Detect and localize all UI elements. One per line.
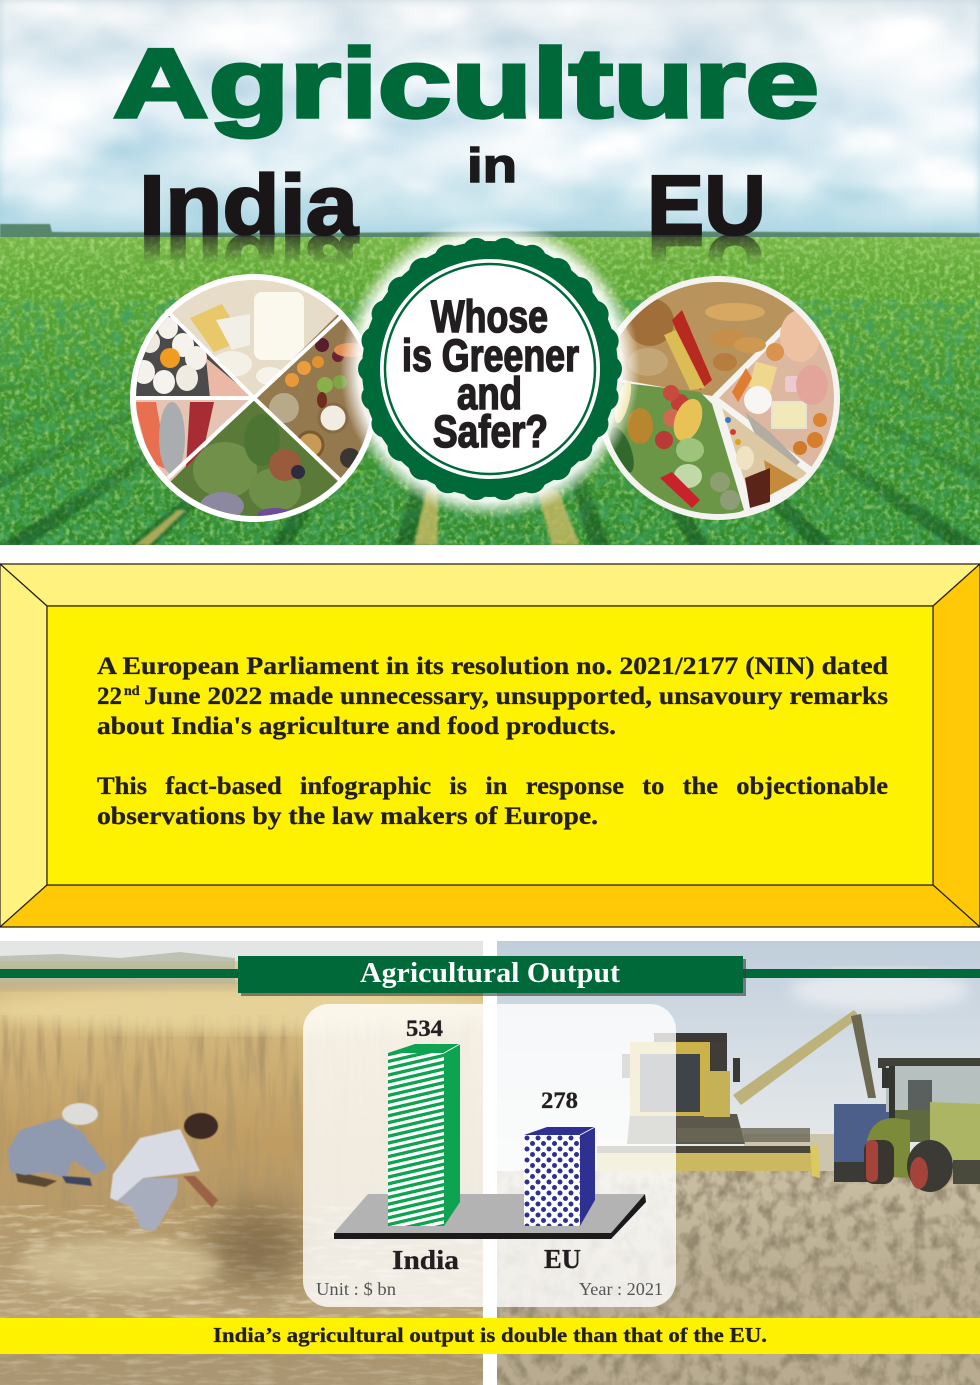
wedge: meat and dairy	[719, 311, 834, 467]
intro text: first paragraph: about India's agriculture and food products.	[97, 713, 616, 740]
intro text: first paragraph: nd	[124, 684, 140, 699]
wedge: pulses and nuts	[256, 314, 370, 482]
title: Agriculture: Agriculture	[113, 28, 819, 138]
intro text: second paragraph	[97, 773, 888, 830]
tractor	[864, 1058, 980, 1192]
photo: Indian farmers harvesting wheat	[0, 941, 500, 1385]
value: India: 534	[406, 1016, 444, 1041]
sky with clouds	[0, 0, 980, 238]
value: EU: 278	[541, 1088, 578, 1113]
intro text: first paragraph: June 2022 made unnecessary, unsupported, unsavoury remarks	[144, 683, 888, 710]
intro text: second paragraph: This fact-based infographic is in response to the objectionable	[97, 773, 888, 800]
green rule left and right	[0, 969, 980, 978]
wedge: grains and starch	[616, 282, 796, 396]
title reflections: India	[139, 218, 359, 312]
category label: India: India	[392, 1245, 460, 1275]
intro text: second paragraph: observations by the law makers of Europe.	[97, 803, 598, 830]
title reflections	[144, 235, 762, 262]
category label: EU: EU	[544, 1244, 581, 1274]
left food plate	[130, 274, 374, 522]
wedge: fruit and vegetables	[607, 380, 744, 514]
panel: introduction (bevelled yellow frame)	[0, 564, 980, 927]
takeaway strip	[0, 1318, 980, 1354]
rounded translucent chart panel	[303, 1004, 676, 1307]
unit note: Unit : $ bn	[316, 1279, 396, 1299]
crop field	[0, 226, 980, 545]
badge text: Safer?	[433, 406, 548, 457]
bar chart: agricultural output	[316, 1016, 663, 1299]
title reflections: EU	[647, 218, 766, 312]
unloading auger	[733, 1010, 876, 1105]
right food plate	[602, 276, 840, 520]
distant tree line	[0, 223, 980, 237]
grain trailer	[834, 1104, 890, 1182]
title: India: India	[139, 158, 359, 252]
wedge: greens and herbs	[170, 400, 338, 516]
badge text: is Greener	[402, 330, 579, 381]
chart base platform	[334, 1194, 646, 1239]
farmer 1	[8, 1103, 108, 1187]
photo: European combine harvester and tractor	[497, 941, 980, 1385]
badge: Whose is Greener and Safer?	[340, 219, 640, 519]
year note: Year : 2021	[579, 1279, 663, 1299]
takeaway strip: India’s agricultural output is double than that of the EU.	[213, 1323, 767, 1347]
badge text	[402, 291, 579, 457]
bar: India	[388, 1044, 460, 1226]
hero banner	[0, 0, 980, 545]
scalloped green seal	[362, 241, 618, 497]
wedge: eggs and chicken	[136, 316, 249, 396]
title: EU: EU	[647, 158, 766, 252]
heading bar: Agricultural Output	[238, 956, 746, 996]
wedge: dairy	[172, 280, 338, 395]
white panel gap	[483, 941, 497, 1385]
combine harvester	[597, 1033, 820, 1178]
badge text: and	[457, 368, 522, 419]
intro text: first paragraph: A European Parliament in its resolution no. 2021/2177 (NIN) dated	[97, 653, 888, 680]
wedge: fish and meat	[136, 400, 249, 482]
intro text: first paragraph	[97, 653, 888, 740]
title: in: in	[467, 140, 517, 193]
badge text: Whose	[431, 291, 548, 342]
bar: EU	[524, 1127, 595, 1226]
farmer 2	[110, 1113, 218, 1231]
intro text: first paragraph: 22	[97, 683, 122, 710]
heading bar: Agricultural Output: Agricultural Output	[360, 958, 621, 989]
plate divider lines	[132, 310, 342, 482]
wedge: fats and sweets	[722, 408, 808, 508]
